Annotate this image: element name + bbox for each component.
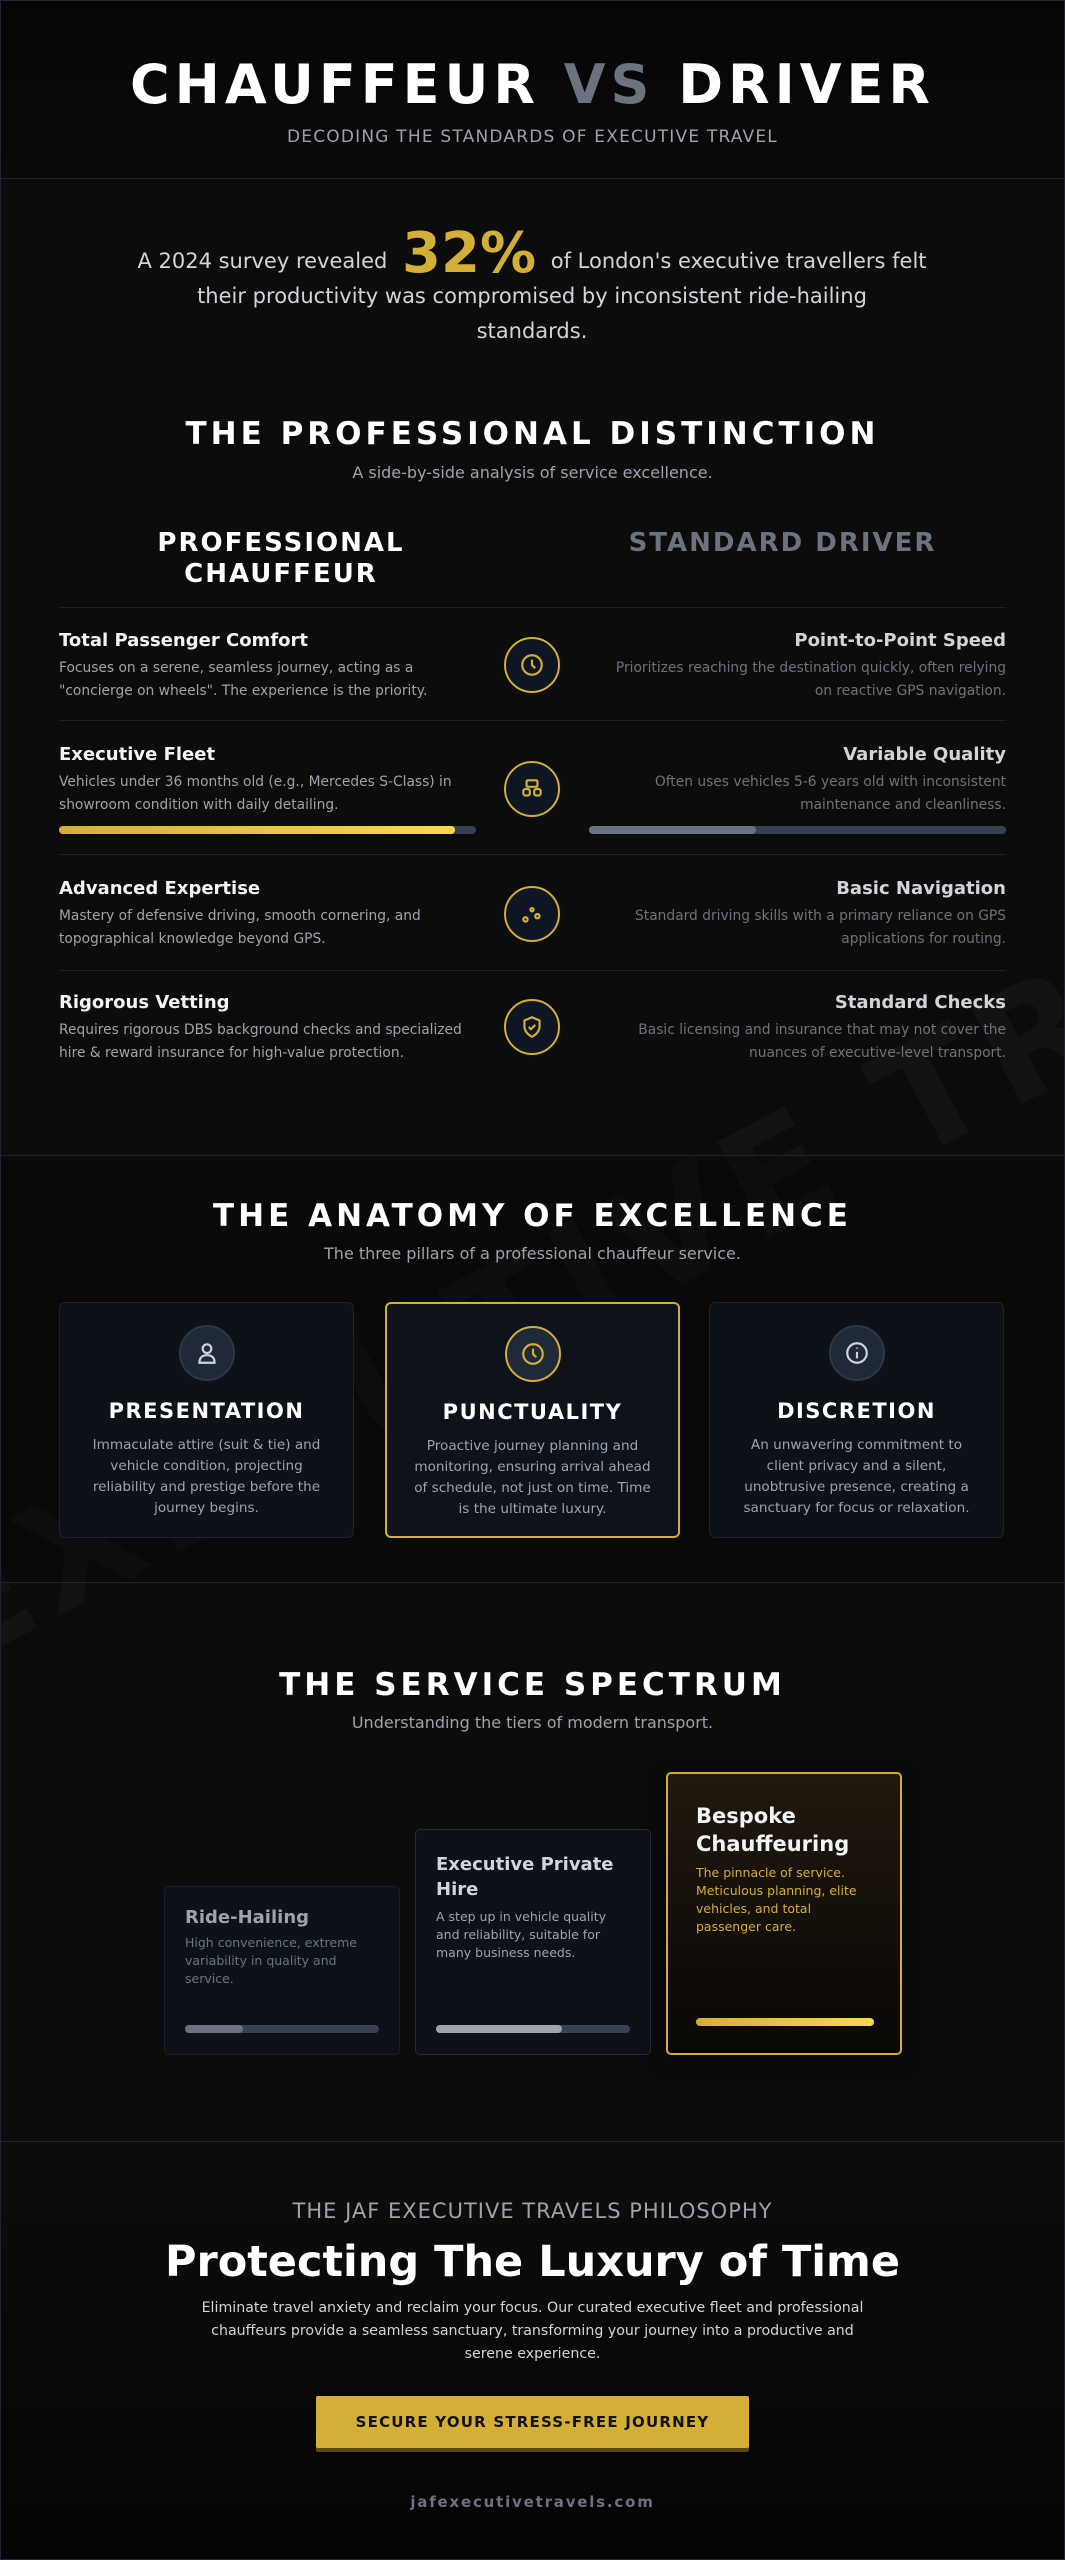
bar: chauffeur fleet: [59, 826, 476, 834]
tier: executive private hire: Executive Private: [436, 1854, 614, 1875]
row: comfort vs speed: Focuses on a serene, seamless journey, acting as a "concierge on wheels". The experience is the priority.: [59, 660, 427, 699]
tier: bespoke chauffeuring: [666, 1772, 902, 2055]
stat callout: their productivity was compromised by inconsistent ride-hailing: [197, 284, 867, 308]
row: vetting vs checks: [59, 992, 1006, 1061]
CTA button: SECURE YOUR STRESS-FREE JOURNEY: [356, 2413, 709, 2431]
card: punctuality: [385, 1302, 680, 1538]
website: jafexecutivetravels.com: [410, 2493, 655, 2511]
subtitle: DECODING THE STANDARDS OF EXECUTIVE TRAVEL: [287, 127, 778, 147]
card: punctuality: Proactive journey planning and monitoring, ensuring arrival ahead of schedule, not just on time. Time is the ultimate luxury.: [414, 1438, 651, 1517]
section background anatomy: [0, 1156, 1065, 1582]
bar: driver fleet: [589, 826, 1006, 834]
stat callout: standards.: [477, 319, 587, 343]
title: CHAUFFEUR VS DRIVER: [130, 53, 935, 116]
footer section: [0, 2142, 1065, 2560]
icon: route: [504, 886, 560, 942]
tier: ride-hailing: Ride-Hailing: [185, 1907, 309, 1928]
row: vetting vs checks: Standard Checks: [835, 992, 1006, 1013]
section heading: anatomy: THE ANATOMY OF EXCELLENCE: [213, 1198, 852, 1234]
icon: clock: [504, 1326, 560, 1382]
column header: driver: STANDARD DRIVER: [629, 528, 936, 558]
column header: chauffeur: CHAUFFEUR: [184, 559, 378, 589]
row: fleet vs quality: Variable Quality: [843, 744, 1006, 765]
tier: ride-hailing: High convenience, extreme variability in quality and service.: [185, 1935, 357, 1986]
paragraph: Eliminate travel anxiety and reclaim your focus. Our curated executive fleet and professional chauffeurs provide a seamless sanctuary, transforming your journey into a productive and serene experience.: [202, 2300, 863, 2362]
tier: executive private hire: Hire: [436, 1879, 478, 1900]
card: presentation: Immaculate attire (suit & tie) and vehicle condition, projecting reliability and prestige before the journey begins.: [93, 1437, 320, 1516]
row: expertise vs navigation: Standard driving skills with a primary reliance on GPS applications for routing.: [635, 908, 1006, 947]
card: punctuality: PUNCTUALITY: [443, 1400, 622, 1424]
icon: shield: [504, 999, 560, 1055]
headline: Protecting The Luxury of Time: [165, 2237, 900, 2287]
row: expertise vs navigation: Mastery of defensive driving, smooth cornering, and topographical knowledge beyond GPS.: [59, 908, 421, 947]
row: fleet vs quality: [59, 744, 1006, 834]
card: presentation: PRESENTATION: [109, 1399, 304, 1423]
row: fleet vs quality: Often uses vehicles 5-6 years old with inconsistent maintenance and cleanliness.: [655, 774, 1006, 813]
row: fleet vs quality: Vehicles under 36 months old (e.g., Mercedes S-Class) in showroom condition with daily detailing.: [59, 774, 452, 813]
row: vetting vs checks: Rigorous Vetting: [59, 992, 230, 1013]
icon: clock: [504, 637, 560, 693]
bar: [185, 2025, 379, 2033]
section subtitle: A side-by-side analysis of service excellence.: [352, 463, 713, 482]
row: vetting vs checks: Requires rigorous DBS background checks and specialized hire & reward insurance for high-value protection.: [59, 1022, 462, 1061]
tier: executive private hire: A step up in vehicle quality and reliability, suitable for many business needs.: [436, 1909, 606, 1960]
row: expertise vs navigation: Basic Navigation: [836, 878, 1006, 899]
card: discretion: DISCRETION: [777, 1399, 936, 1423]
row: expertise vs navigation: Advanced Expertise: [59, 878, 260, 899]
icon: car: [504, 761, 560, 817]
card: discretion: An unwavering commitment to client privacy and a silent, unobtrusive presence, creating a sanctuary for focus or relaxation.: [743, 1437, 970, 1516]
tier: executive private hire: [415, 1829, 651, 2055]
row: expertise vs navigation: [59, 878, 1006, 947]
icon: info: [828, 1325, 884, 1381]
tier: bespoke chauffeuring: Chauffeuring: [696, 1832, 849, 1856]
row: comfort vs speed: Point-to-Point Speed: [794, 630, 1006, 651]
row: comfort vs speed: [59, 630, 1006, 699]
bar: [436, 2025, 630, 2033]
philosophy label: THE JAF EXECUTIVE TRAVELS PHILOSOPHY: [292, 2199, 772, 2223]
header: [0, 0, 1065, 178]
section subtitle: Understanding the tiers of modern transport.: [352, 1713, 713, 1732]
tier: ride-hailing: [164, 1886, 400, 2055]
bar: [696, 2018, 874, 2026]
section heading: spectrum: THE SERVICE SPECTRUM: [279, 1667, 786, 1703]
stat callout: A 2024 survey revealed 32% of London's executive travellers felt: [137, 221, 927, 286]
tier: bespoke chauffeuring: Bespoke: [696, 1804, 796, 1828]
section subtitle: The three pillars of a professional chauffeur service.: [324, 1244, 741, 1263]
row: fleet vs quality: Executive Fleet: [59, 744, 215, 765]
icon: person: [178, 1325, 234, 1381]
tier: bespoke chauffeuring: The pinnacle of service. Meticulous planning, elite vehicles, and total passenger care.: [696, 1865, 857, 1934]
column header: chauffeur: [157, 528, 405, 589]
row: comfort vs speed: Prioritizes reaching the destination quickly, often relying on reactive GPS navigation.: [616, 660, 1006, 699]
row: comfort vs speed: Total Passenger Comfort: [59, 630, 308, 651]
CTA button: [316, 2396, 749, 2448]
row: vetting vs checks: Basic licensing and insurance that may not cover the nuances of executive-level transport.: [638, 1022, 1006, 1061]
card: discretion: [709, 1302, 1004, 1538]
column header: chauffeur: PROFESSIONAL: [157, 528, 405, 558]
section heading: professional distinction: THE PROFESSIONAL DISTINCTION: [186, 416, 879, 452]
stat callout: [137, 221, 927, 343]
card: presentation: [59, 1302, 354, 1538]
